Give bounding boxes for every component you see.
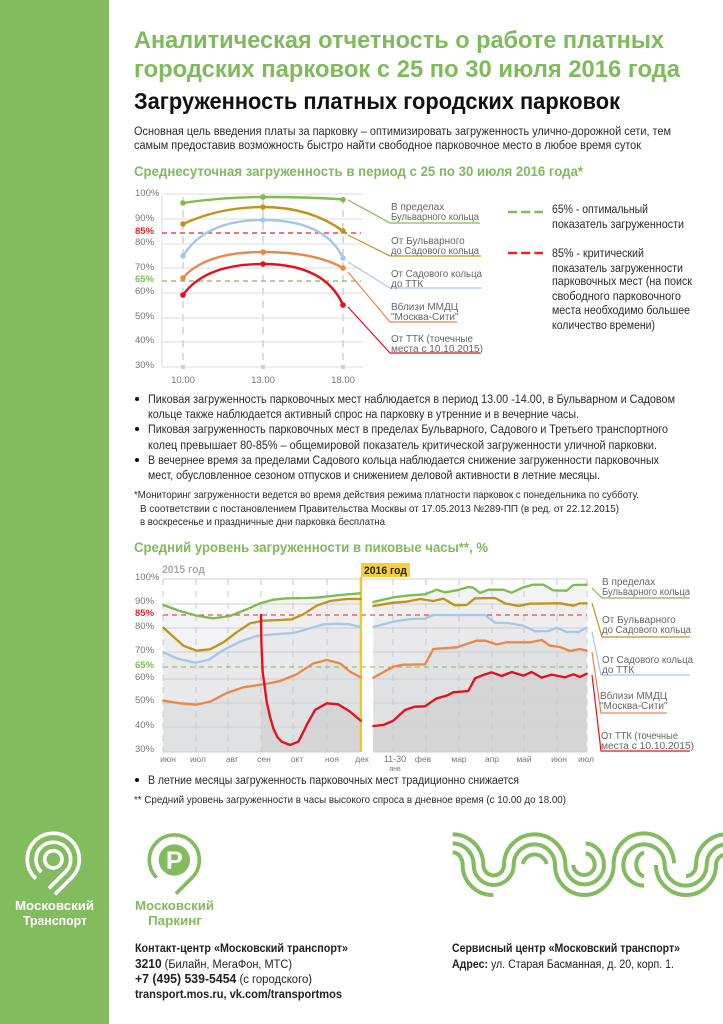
contact centre block: +7 (495) 539-5454 (с городского) (135, 972, 312, 986)
logo: Moscow Transport (15, 833, 94, 928)
series labels with leader lines: до Садового кольца (602, 625, 691, 636)
subtitle: Загруженность платных городских парковок (134, 88, 620, 114)
series labels with leader lines: места с 10.10.2015) (391, 344, 483, 355)
y axis labels: 50% (135, 695, 155, 706)
logo: Moscow Parking: Московский (135, 898, 214, 913)
y axis labels: 100% (135, 572, 160, 583)
y axis labels: 40% (135, 720, 155, 731)
green sidebar (0, 0, 109, 1024)
line chart: daily load (135, 188, 483, 386)
y axis labels: 100% (135, 188, 160, 199)
footnote: monitoring (134, 489, 639, 528)
icon: nine rings (27, 833, 79, 894)
legend: 85% critical: места необходимо большее (552, 305, 690, 317)
decorative wave emblem (453, 833, 723, 895)
y axis labels: 50% (135, 311, 155, 322)
month labels: июл (578, 754, 594, 764)
threshold lines (163, 615, 587, 667)
curve: Boulevard ring (180, 194, 346, 206)
series labels with leader lines: до ТТК (391, 279, 423, 290)
area fills 2016 (373, 585, 587, 752)
month labels: апр (485, 754, 499, 764)
y axis labels: 60% (135, 286, 155, 297)
month labels: 11-30 (384, 754, 406, 764)
contact centre block (135, 943, 348, 1001)
logo: Moscow Parking: Паркинг (148, 913, 203, 928)
series labels with leader lines: От Бульварного (602, 615, 676, 626)
x axis labels (171, 375, 355, 386)
y axis labels: 90% (135, 213, 155, 224)
logo: Moscow Transport: Московский (15, 898, 94, 913)
month labels (160, 754, 594, 773)
series labels with leader lines: В пределах (602, 577, 655, 588)
legend: 85% critical (508, 248, 693, 332)
year label 2015: 2015 год (162, 564, 205, 576)
month labels: авг (226, 754, 238, 764)
curves 2015 (163, 593, 361, 745)
service centre block (452, 943, 680, 971)
month labels: мар (451, 754, 467, 764)
bullet list: findings (135, 394, 675, 482)
logo: Moscow Transport: Транспорт (23, 913, 87, 928)
y axis labels: 70% (135, 262, 155, 273)
series labels with leader lines (348, 200, 483, 355)
month labels: янв (389, 766, 401, 773)
bullet list: findings: мест, обусловленное сезоном отпусков и снижением деловой активности в летние месяцы. (148, 470, 600, 482)
series labels with leader lines: Бульварного кольца (602, 587, 690, 598)
legend: 85% critical: показатель загруженности (552, 263, 683, 275)
month labels: фев (415, 754, 432, 764)
year marker 2016: 2016 год (364, 565, 407, 577)
service centre block: Адрес: ул. Старая Басманная, д. 20, корп. 1. (452, 959, 674, 971)
bullet: summer months: В летние месяцы загруженность парковочных мест традиционно снижается (148, 775, 519, 787)
x axis labels: 13.00 (251, 375, 275, 386)
series labels with leader lines: до Садового кольца (391, 246, 479, 257)
threshold lines (162, 233, 361, 281)
series labels with leader lines: От ТТК (точечные (601, 731, 678, 742)
y axis labels: 85% (135, 226, 155, 237)
curve: Moscow-City (180, 249, 346, 281)
heading: daily load: Среднесуточная загруженность в период с 25 по 30 июля 2016 года* (134, 163, 584, 179)
month labels: июл (190, 754, 206, 764)
series labels with leader lines: места с 10.10.2015) (601, 741, 694, 752)
legend: 65% optimal: показатель загруженности (552, 219, 684, 231)
intro text (134, 126, 671, 152)
legend: 85% critical: 85% - критический (552, 248, 644, 260)
area fills 2015 (163, 593, 361, 752)
month labels: окт (291, 754, 303, 764)
curve: Boulevard to Garden ring (180, 204, 346, 234)
month labels: дек (355, 754, 369, 764)
legend: 85% critical: парковочных мест (на поиск (552, 276, 693, 288)
bullet list: findings: В вечернее время за пределами Садового кольца наблюдается снижение загруженности парковочных (148, 455, 659, 467)
footnote: peak hours: ** Средний уровень загруженности в часы высокого спроса в дневное время (с 10.00 до 18.00) (134, 794, 566, 806)
series labels with leader lines: Бульварного кольца (391, 212, 479, 223)
legend: 85% critical: свободного парковочного (552, 291, 681, 303)
series labels with leader lines: От Садового кольца (391, 269, 482, 280)
series labels with leader lines: От Бульварного (391, 236, 465, 247)
series labels with leader lines: до ТТК (602, 665, 634, 676)
contact centre block: transport.mos.ru, vk.com/transportmos (135, 989, 342, 1001)
x axis labels: 18.00 (331, 375, 355, 386)
month labels: ноя (325, 754, 339, 764)
heading: peak hours: Средний уровень загруженности в пиковые часы**, % (134, 539, 489, 555)
series labels with leader lines: В пределах (391, 202, 444, 213)
month labels: май (516, 754, 532, 764)
footnote: monitoring: В соответствии с постановлением Правительства Москвы от 17.05.2013 №289-ПП (в ред. от 22.12.2015) (140, 503, 619, 515)
y axis labels: 60% (135, 672, 155, 683)
series labels with leader lines: От Садового кольца (602, 655, 693, 666)
curves 2016 (373, 585, 587, 726)
y axis labels: 30% (135, 360, 155, 371)
footnote: monitoring: в воскресенье и праздничные дни парковка бесплатна (140, 516, 385, 528)
legend: 65% optimal: 65% - оптимальный (552, 204, 648, 216)
bullet list: findings: кольце также наблюдается активный спрос на парковку в утренние и в вечерние часы. (148, 409, 579, 421)
line chart: peak hours (135, 563, 694, 773)
y axis labels: 70% (135, 645, 155, 656)
logo: Moscow Parking (135, 835, 214, 928)
y axis labels: 85% (135, 608, 155, 619)
legend: 65% optimal (508, 204, 684, 231)
y axis labels: 90% (135, 596, 155, 607)
contact centre block: 3210 (Билайн, МегаФон, МТС) (135, 957, 292, 971)
bullet list: findings: Пиковая загруженность парковочных мест в пределах Бульварного, Садового и Третьего транспортного (148, 424, 668, 436)
month labels: июн (160, 754, 176, 764)
title: городских парковок с 25 по 30 июля 2016 года (134, 56, 681, 83)
legend: 85% critical: количество времени) (552, 320, 655, 332)
month labels: сен (257, 754, 271, 764)
y axis labels (135, 572, 160, 755)
icon: parking pin: P (166, 847, 183, 875)
intro text: самым предоставив возможность быстро найти свободное парковочное место в любое время суток (134, 140, 642, 152)
month labels: июн (551, 754, 567, 764)
series labels with leader lines: Вблизи ММДЦ (391, 301, 459, 313)
year marker 2016 (360, 563, 410, 752)
series labels with leader lines (592, 577, 694, 752)
curve: Garden ring to TTK (180, 217, 346, 261)
y axis labels: 30% (135, 744, 155, 755)
series labels with leader lines: "Москва-Сити" (600, 701, 668, 712)
series labels with leader lines: "Москва-Сити" (391, 312, 459, 323)
y axis labels: 80% (135, 237, 155, 248)
bullet list: findings: Пиковая загруженность парковочных мест наблюдается в период 13.00 -14.00, в Бульварном и Садовом (148, 394, 675, 406)
title (134, 27, 681, 83)
intro text: Основная цель введения платы за парковку – оптимизировать загруженность улично-дорожной сети, тем (134, 126, 671, 138)
y axis labels: 40% (135, 335, 155, 346)
x axis labels: 10.00 (171, 375, 195, 386)
y axis labels (135, 188, 160, 371)
series labels with leader lines: Вблизи ММДЦ (600, 690, 668, 702)
service centre block: Сервисный центр «Московский транспорт» (452, 943, 680, 955)
contact centre block: Контакт-центр «Московский транспорт» (135, 943, 348, 955)
title: Аналитическая отчетность о работе платных (134, 27, 665, 54)
footnote: monitoring: *Мониторинг загруженности ведется во время действия режима платности парковок с понедельника по субботу. (134, 489, 639, 501)
series labels with leader lines: От ТТК (точечные (391, 334, 473, 345)
y axis labels: 65% (135, 660, 155, 671)
y axis labels: 80% (135, 621, 155, 632)
y axis labels: 65% (135, 274, 155, 285)
bullet list: findings: колец превышает 80-85% – общемировой показатель критической загруженности уличной парковки. (148, 440, 657, 452)
curve: from TTK (180, 261, 346, 308)
